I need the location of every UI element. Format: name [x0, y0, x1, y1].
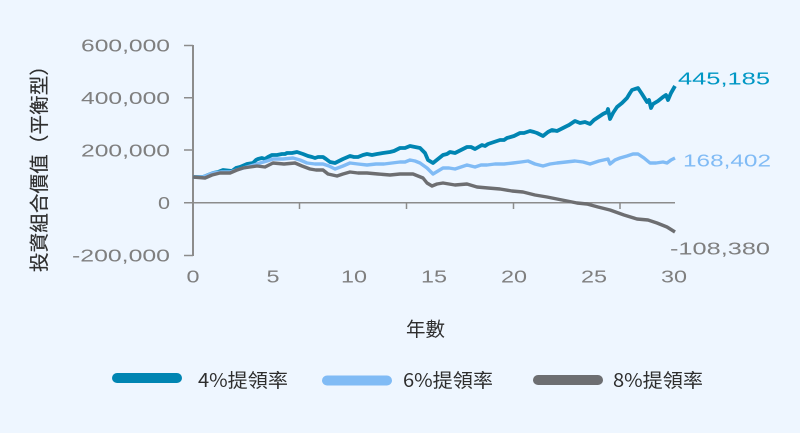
line: 4% withdrawal: [193, 86, 675, 177]
y axis labels: [72, 36, 170, 266]
end label: 168,402: 168,402: [683, 150, 771, 170]
y axis labels: 400,000: [81, 88, 170, 108]
y axis labels: 600,000: [81, 36, 170, 56]
y axis title: 投資組合價值（平衡型）: [23, 56, 52, 272]
end label: 445,185: 445,185: [678, 68, 770, 88]
x axis title: 年數: [406, 313, 445, 342]
y axis labels: 200,000: [81, 140, 170, 160]
legend item: 6%: 6%提領率: [403, 366, 493, 393]
x axis labels: 20: [501, 266, 527, 286]
y axis labels: 0: [158, 193, 170, 213]
legend item: 6%: [322, 366, 493, 393]
legend item: 8%: 8%提領率: [613, 366, 703, 393]
x axis labels: [186, 266, 687, 286]
x axis labels: 15: [421, 266, 447, 286]
x axis labels: 30: [661, 266, 687, 286]
end label: -108,380: -108,380: [670, 238, 770, 258]
line: 8% withdrawal: [193, 163, 675, 232]
x axis labels: 25: [581, 266, 607, 286]
legend: [112, 366, 703, 393]
legend item: 4%: 4%提領率: [198, 366, 288, 393]
x axis labels: 0: [186, 266, 200, 286]
axes: [184, 45, 675, 256]
x axis labels: 5: [266, 266, 280, 286]
legend item: 4%: [112, 366, 288, 393]
legend item: 8%: [533, 366, 703, 393]
line: 6% withdrawal: [193, 154, 675, 177]
x axis labels: 10: [341, 266, 367, 286]
y axis labels: -200,000: [72, 246, 170, 266]
